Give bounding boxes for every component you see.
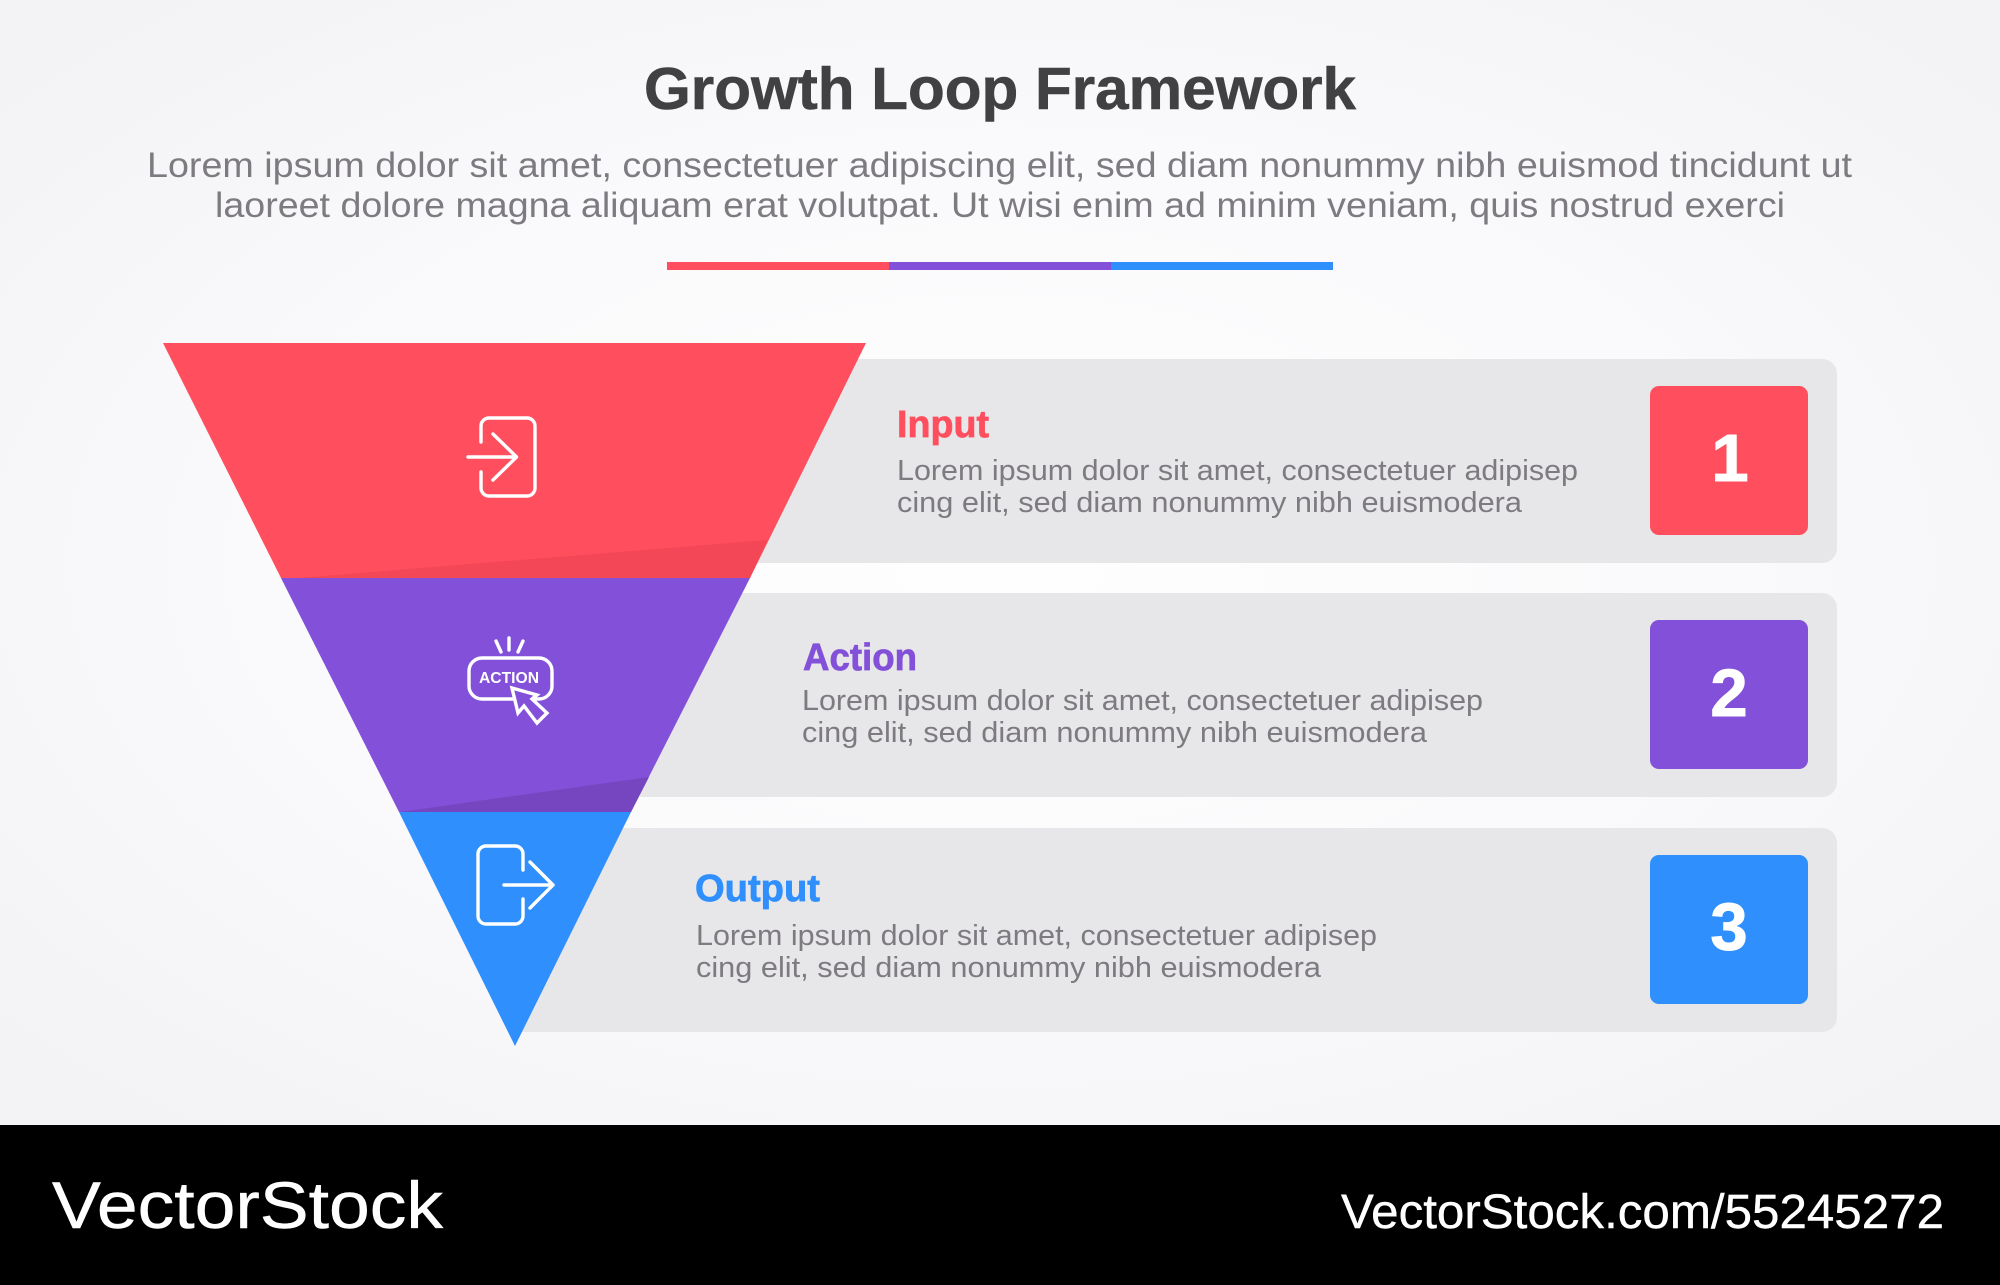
number badge 2: [1650, 620, 1808, 769]
segment: input: [163, 343, 866, 578]
body text: action: Lorem ipsum dolor sit amet, consectetuer adipisep: [802, 685, 1483, 717]
panel: output: [520, 828, 1837, 1032]
subtitle: Lorem ipsum dolor sit amet, consectetuer adipiscing elit, sed diam nonummy nibh euismod tincidunt ut: [147, 146, 1852, 185]
body text: input: cing elit, sed diam nonummy nibh euismodera: [897, 487, 1523, 519]
body text: output: cing elit, sed diam nonummy nibh euismodera: [696, 952, 1322, 984]
icon: action button with cursor: ACTION: [479, 670, 539, 687]
subtitle: [147, 146, 1852, 225]
heading: output: Output: [695, 868, 820, 910]
icon: action button with cursor: [469, 638, 552, 723]
body text: action: [802, 685, 1483, 749]
number badge 2: 2: [1710, 656, 1748, 731]
icon: enter arrow: [468, 418, 535, 496]
icon: exit arrow: [478, 846, 553, 924]
body text: output: Lorem ipsum dolor sit amet, consectetuer adipisep: [696, 920, 1377, 952]
footer band: [0, 1125, 2000, 1285]
segment: output: [399, 812, 631, 1046]
panel: input: [750, 359, 1837, 563]
panel: action: [640, 593, 1837, 797]
body text: output: [696, 920, 1377, 984]
body text: action: cing elit, sed diam nonummy nibh euismodera: [802, 717, 1428, 749]
subtitle: laoreet dolore magna aliquam erat volutpat. Ut wisi enim ad minim veniam, quis nostrud exerci: [215, 186, 1785, 225]
footer url text: VectorStock.com/55245272: [1341, 1186, 1944, 1239]
footer logo text: VectorStock: [52, 1168, 444, 1242]
number badge 3: 3: [1710, 890, 1748, 965]
title: Growth Loop Framework: [644, 56, 1356, 122]
number badge 3: [1650, 855, 1808, 1004]
tricolor divider: [667, 262, 1333, 270]
inverted pyramid: [163, 343, 866, 1046]
heading: input: Input: [897, 404, 989, 446]
number badge 1: [1650, 386, 1808, 535]
heading: action: Action: [803, 637, 917, 679]
body text: input: Lorem ipsum dolor sit amet, consectetuer adipisep: [897, 455, 1578, 487]
number badge 1: 1: [1711, 421, 1749, 496]
body text: input: [897, 455, 1578, 519]
segment: action: [281, 578, 750, 812]
